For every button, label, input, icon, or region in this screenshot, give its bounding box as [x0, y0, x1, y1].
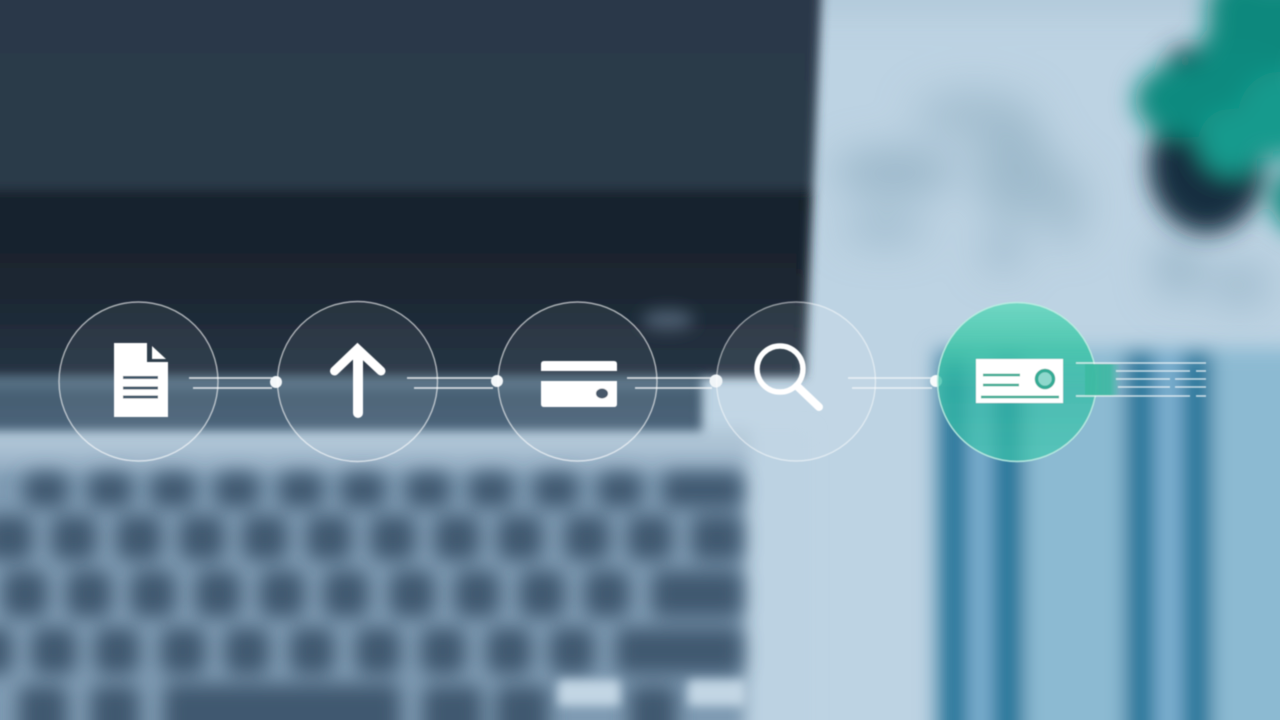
step 1: document circle	[59, 302, 218, 461]
connector 2	[407, 375, 503, 388]
laptop deck	[0, 430, 810, 720]
keyboard keys	[28, 477, 64, 503]
step 3: payment circle	[498, 302, 657, 461]
icon: credit card	[541, 361, 617, 407]
background: laptop	[0, 0, 823, 720]
connector 3	[627, 374, 722, 388]
laptop screen	[0, 0, 823, 377]
background: desk surface	[828, 2, 1269, 310]
icon: magnifier	[757, 346, 819, 407]
step 2: upload circle	[278, 302, 438, 462]
step 4: search circle	[716, 302, 876, 461]
icon: document	[114, 343, 168, 417]
background: potted plant	[1135, 0, 1280, 234]
connector 4	[848, 375, 942, 388]
teal output band	[1085, 364, 1121, 396]
step 5: teal result circle	[938, 302, 1206, 462]
icon: up arrow	[334, 349, 381, 413]
connector 1	[189, 376, 282, 388]
icon: ticket card	[976, 359, 1063, 403]
keyboard highlights	[558, 680, 620, 706]
output lines	[1076, 363, 1206, 396]
background: striped notebook	[934, 348, 1280, 720]
